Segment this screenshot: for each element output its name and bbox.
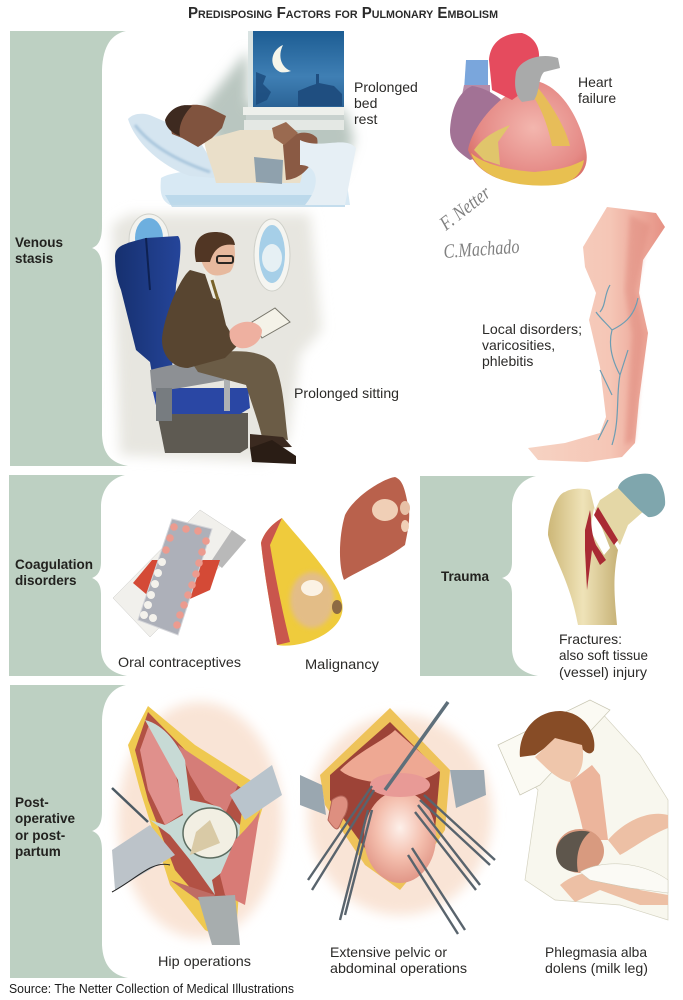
label: pelvic operations: abdominal operations	[330, 960, 467, 976]
label: prolonged bed rest: rest	[354, 111, 377, 127]
label: phlegmasia alba dolens: Phlegmasia alba	[545, 944, 647, 960]
heading: coagulation disorders: Coagulation	[15, 557, 93, 572]
heading: trauma: Trauma	[441, 569, 490, 584]
heading: post-operative or post-partum: partum	[15, 844, 61, 859]
panel: post-operative or post-partum brace	[10, 685, 128, 978]
panel: venous stasis brace	[10, 31, 128, 466]
panel: coagulation disorders brace	[9, 475, 127, 676]
label: prolonged bed rest: Prolonged	[354, 79, 418, 95]
label: malignancy: Malignancy	[305, 656, 379, 672]
heading: venous stasis: Venous	[15, 235, 63, 250]
illustration: fractured femur	[548, 474, 665, 625]
panel: trauma brace	[420, 476, 538, 676]
illustration: heart	[450, 33, 587, 186]
label: pelvic operations: Extensive pelvic or	[330, 944, 447, 960]
signature: C. Machado: C.Machado	[443, 236, 520, 263]
label: hip operations: Hip operations	[158, 953, 251, 969]
label: prolonged sitting: Prolonged sitting	[294, 385, 399, 401]
illustration: pelvic operation	[300, 702, 495, 934]
label: heart failure: failure	[578, 90, 616, 106]
label: heart failure: Heart	[578, 74, 612, 90]
label: oral contraceptives: Oral contraceptives	[118, 654, 241, 670]
heading: post-operative or post-partum: or post-	[15, 828, 65, 843]
illustration: phlegmasia alba dolens, mother and baby	[498, 700, 668, 920]
label: local disorders: phlebitis	[482, 353, 533, 369]
label: fractures: (vessel) injury	[559, 664, 647, 680]
heading: post-operative or post-partum: operative	[15, 811, 76, 826]
label: local disorders: varicosities,	[482, 337, 555, 353]
illustration: oral contraceptives	[113, 510, 246, 637]
illustration: hip operation	[112, 702, 282, 945]
heading: venous stasis: stasis	[15, 251, 53, 266]
illustration: prolonged sitting	[112, 214, 322, 464]
label: phlegmasia alba dolens: dolens (milk leg)	[545, 960, 648, 976]
title: Predisposing Factors for Pulmonary Embolism	[188, 5, 498, 22]
illustration: malignancy, lung	[340, 477, 410, 580]
label: local disorders: Local disorders;	[482, 321, 582, 337]
label: fractures: Fractures:	[559, 631, 622, 647]
illustration: leg with varicosities	[528, 207, 665, 462]
heading: post-operative or post-partum: Post-	[15, 795, 49, 810]
illustration: malignancy, breast	[261, 518, 343, 646]
signature: F. Netter: F. Netter	[435, 182, 495, 235]
illustration: prolonged bed rest	[128, 31, 356, 207]
label: fractures: also soft tissue	[559, 647, 648, 663]
label: prolonged bed rest: bed	[354, 95, 377, 111]
heading: coagulation disorders: disorders	[15, 573, 77, 588]
source note: Source: The Netter Collection of Medical Illustrations	[9, 982, 294, 996]
